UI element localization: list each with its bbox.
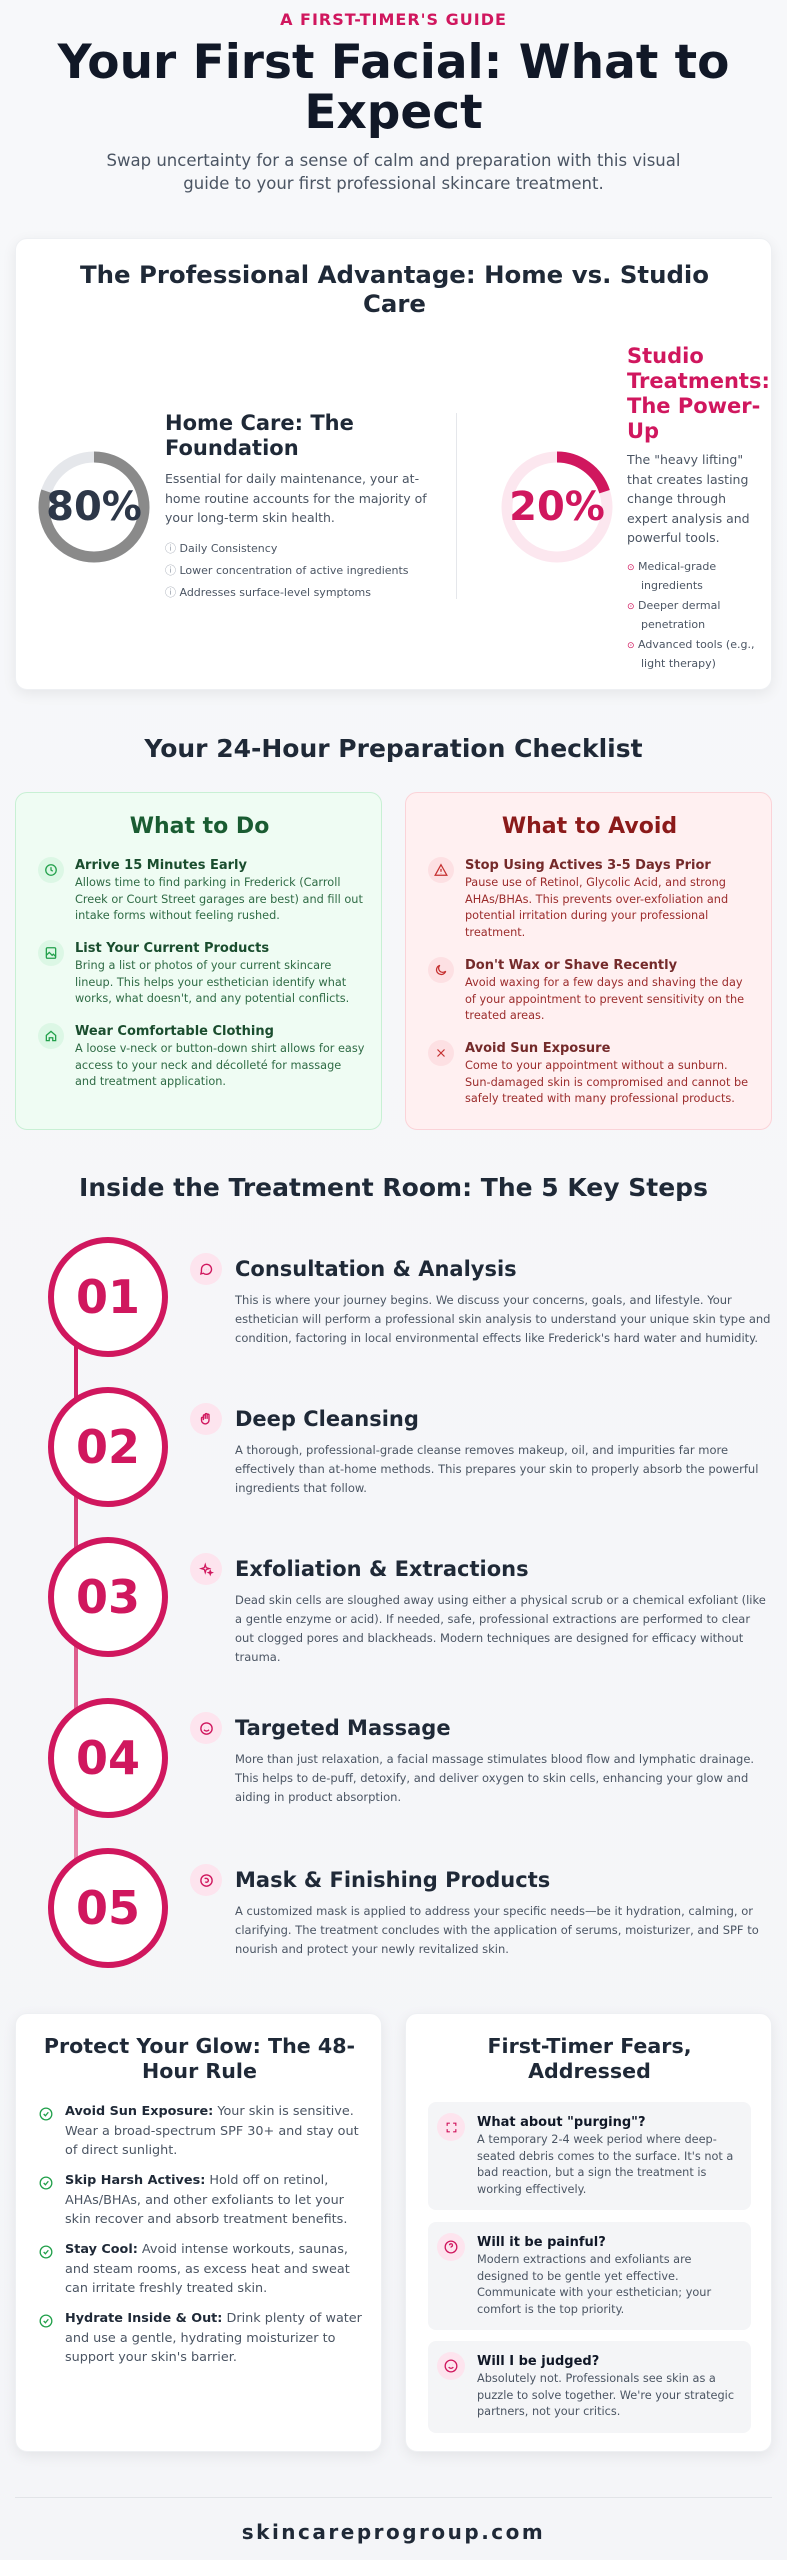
panel: what to do: What to Do	[130, 814, 269, 839]
rule items: Avoid Sun Exposure: Your skin is sensitive.	[65, 2104, 354, 2119]
item: actives: Pause use of Retinol, Glycolic Acid, and strong	[465, 876, 726, 889]
rule items: of direct sunlight.	[65, 2143, 177, 2158]
home care text	[165, 411, 427, 599]
step 5: Mask & Finishing Products	[235, 1868, 550, 1892]
step 4: aiding in product absorption.	[235, 1790, 401, 1804]
subtitle: Swap uncertainty for a sense of calm and preparation with this visual	[107, 151, 680, 170]
step 1: condition, factoring in local environmental effects like Frederick's hard water and humidity.	[235, 1331, 758, 1345]
rule items: skin recover and absorb treatment benefits.	[65, 2212, 347, 2227]
home care text: your long-term skin health.	[165, 510, 335, 525]
item: actives: potential irritation during your professional	[465, 909, 708, 922]
faq: purging: What about "purging"?	[477, 2115, 646, 2130]
step 2: 02	[76, 1420, 140, 1474]
heading: Care	[363, 289, 426, 318]
studio text: The "heavy lifting"	[627, 452, 743, 467]
bullets	[165, 542, 409, 599]
step 3: Exfoliation & Extractions	[235, 1557, 529, 1581]
chart: 20% donut	[502, 452, 612, 562]
item: wax	[428, 957, 744, 1022]
studio text: powerful tools.	[627, 530, 720, 545]
heading	[80, 260, 709, 318]
kicker: A FIRST-TIMER'S GUIDE	[280, 10, 507, 29]
faq: painful: Modern extractions and exfoliants are	[477, 2253, 691, 2266]
panel: fears: Addressed	[528, 2059, 651, 2083]
item: sun: Avoid Sun Exposure	[465, 1041, 610, 1056]
panel: 48-hour rule: Protect Your Glow: The 48-	[44, 2034, 355, 2058]
panel: what to do	[15, 792, 382, 1130]
step 5: nourish and protect your newly revitalized skin.	[235, 1942, 509, 1956]
subtitle: guide to your first professional skincare treatment.	[183, 174, 604, 193]
step 4: This helps to de-puff, detoxify, and deliver oxygen to skin cells, enhancing your glow and	[235, 1771, 748, 1785]
item: wax: Avoid waxing for a few days and shaving the day	[465, 976, 743, 989]
studio text: Up	[627, 419, 659, 443]
title: Expect	[304, 85, 483, 140]
faq: judged	[428, 2341, 751, 2433]
studio text: Studio	[627, 344, 704, 368]
step 1	[48, 1237, 770, 1357]
item: list products: Bring a list or photos of your current skincare	[75, 959, 331, 972]
step 4: 04	[76, 1731, 140, 1785]
faq: painful: designed to be gentle yet effective.	[477, 2270, 679, 2283]
heading: treatment room: Inside the Treatment Room: The 5 Key Steps	[79, 1173, 708, 1202]
panel: home vs studio	[15, 238, 772, 690]
item: list products: works, what doesn't, and any potential conflicts.	[75, 992, 349, 1005]
bullets: ⊙ Medical-grade	[627, 560, 716, 573]
step 3: out clogged pores and blackheads. Modern techniques are designed for efficacy without	[235, 1631, 743, 1645]
step 4: More than just relaxation, a facial massage stimulates blood flow and lymphatic drainage.	[235, 1752, 754, 1766]
faq: purging: seated debris comes to the surface. It's not a	[477, 2150, 733, 2163]
step 1: 01	[76, 1270, 140, 1324]
step 2: effectively than at-home methods. This prepares your skin to properly absorb the powerful	[235, 1462, 758, 1476]
item: wax: of your appointment to prevent sensitivity on the	[465, 993, 744, 1006]
step 2: Deep Cleansing	[235, 1407, 419, 1431]
rule items: Hydrate Inside & Out: Drink plenty of water	[65, 2311, 362, 2326]
rule items	[40, 2104, 362, 2365]
rule items: Skip Harsh Actives: Hold off on retinol,	[65, 2173, 328, 2188]
item: arrive early: Arrive 15 Minutes Early	[75, 858, 247, 873]
studio text: The Power-	[627, 394, 760, 418]
bullets: ingredients	[641, 579, 703, 592]
item: wax: Don't Wax or Shave Recently	[465, 958, 677, 973]
rule items: Wear a broad-spectrum SPF 30+ and stay out	[65, 2124, 359, 2138]
step 2: A thorough, professional-grade cleanse removes makeup, oil, and impurities far more	[235, 1443, 728, 1457]
studio text: light therapy)	[641, 657, 716, 670]
item: clothing: access to your neck and décolleté for massage	[75, 1059, 341, 1072]
item: list products: List Your Current Products	[75, 941, 269, 956]
item: sun: safely treated with many professional products.	[465, 1092, 735, 1105]
step 3	[48, 1537, 766, 1664]
step 2	[48, 1387, 758, 1507]
faq: painful: comfort is the top priority.	[477, 2303, 624, 2316]
step 1: This is where your journey begins. We discuss your concerns, goals, and lifestyle. Your	[235, 1293, 732, 1307]
item: clothing: A loose v-neck or button-down shirt allows for easy	[75, 1042, 364, 1055]
item: arrive early: intake forms without feeling rushed.	[75, 909, 280, 922]
faq: purging: bad reaction, but a sign the treatment is	[477, 2166, 706, 2179]
panel: fears: First-Timer Fears,	[487, 2034, 692, 2058]
panel: what to avoid: What to Avoid	[502, 814, 677, 839]
step 4: Targeted Massage	[235, 1716, 451, 1740]
item: sun	[428, 1040, 748, 1105]
item: sun: Come to your appointment without a sunburn.	[465, 1059, 728, 1072]
panel: 48-hour rule: Hour Rule	[142, 2059, 257, 2083]
chart: 80% donut	[38, 452, 150, 562]
timeline line	[74, 1340, 78, 1860]
panel: 48-hour rule	[15, 2013, 382, 2452]
studio text: penetration	[641, 618, 705, 631]
item: arrive early: Creek or Court Street garages are best) and fill out	[75, 893, 363, 906]
item: wax: treated areas.	[465, 1009, 545, 1022]
step 5: A customized mask is applied to address your specific needs—be it hydration, calming, or	[235, 1904, 753, 1918]
panel: 48-hour rule: and use a gentle, hydrating moisturizer to	[65, 2330, 335, 2346]
step 3: Dead skin cells are sloughed away using either a physical scrub or a chemical exfoliant (like	[235, 1593, 766, 1607]
faq: judged: Absolutely not. Professionals see skin as a	[477, 2372, 716, 2385]
title	[57, 35, 729, 140]
studio text: ⊙ Advanced tools (e.g.,	[627, 638, 754, 651]
item: list products: lineup. This helps your esthetician identify what	[75, 976, 346, 989]
step 5	[48, 1848, 759, 1968]
rule items: AHAs/BHAs, and other exfoliants to let your	[65, 2192, 344, 2208]
panel: what to avoid	[405, 792, 772, 1130]
bullets	[627, 560, 716, 592]
step 3: trauma.	[235, 1650, 280, 1664]
faq: painful	[428, 2222, 751, 2330]
rule items: Stay Cool: Avoid intense workouts, saunas,	[65, 2242, 348, 2257]
step 3: 03	[76, 1570, 140, 1624]
panel: fears	[405, 2013, 772, 2452]
step 2: ingredients that follow.	[235, 1481, 367, 1495]
faq: painful: Communicate with your esthetician; your	[477, 2286, 711, 2299]
faq: purging	[428, 2102, 751, 2210]
studio text: ⊙ Deeper dermal	[627, 599, 720, 612]
studio text: expert analysis and	[627, 510, 750, 526]
home care text: Foundation	[165, 436, 299, 460]
studio text: that creates lasting	[627, 472, 748, 486]
step 3: a gentle enzyme or acid). If needed, safe, professional extractions are performed to clear	[235, 1612, 750, 1626]
bullets: ⓘ Addresses surface-level symptoms	[165, 586, 371, 599]
heading: checklist: Your 24-Hour Preparation Checklist	[144, 734, 643, 763]
studio text: Treatments:	[627, 369, 770, 393]
home care text: Essential for daily maintenance, your at-	[165, 471, 419, 486]
step 1: esthetician will perform a professional skin analysis to understand your unique skin type and	[235, 1312, 770, 1326]
item: arrive early: Allows time to find parking in Frederick (Carroll	[75, 876, 340, 889]
bullets: ⓘ Daily Consistency	[165, 542, 277, 555]
item: sun: Sun-damaged skin is compromised and cannot be	[465, 1076, 748, 1089]
item: arrive early	[38, 857, 363, 922]
home care text: home routine accounts for the majority of	[165, 490, 427, 506]
studio text: change through	[627, 491, 726, 506]
step 1: Consultation & Analysis	[235, 1257, 517, 1281]
item: actives: treatment.	[465, 926, 525, 939]
chart: 20% donut: 20%	[509, 484, 605, 530]
footer: skincareprogroup.com	[242, 2520, 545, 2544]
bullets: ⓘ Lower concentration of active ingredients	[165, 564, 409, 577]
faq: judged: partners, not your critics.	[477, 2405, 620, 2418]
title: Your First Facial: What to	[58, 35, 729, 90]
heading: The Professional Advantage: Home vs. Studio	[80, 260, 709, 289]
item: clothing: Wear Comfortable Clothing	[75, 1024, 274, 1039]
home care text: Home Care: The	[165, 411, 354, 435]
faq: purging: working effectively.	[477, 2183, 586, 2196]
faq: purging: A temporary 2-4 week period where deep-	[477, 2133, 717, 2146]
step 4	[48, 1698, 754, 1818]
subtitle	[107, 151, 680, 193]
item: actives	[428, 857, 728, 939]
item: clothing	[38, 1023, 364, 1088]
step 5: clarifying. The treatment concludes with the application of serums, moisturizer, and SPF to	[235, 1923, 759, 1937]
rule items: and steam rooms, as excess heat and sweat	[65, 2262, 350, 2276]
faq: judged: puzzle to solve together. We're your strategic	[477, 2389, 734, 2402]
item: actives: AHAs/BHAs. This prevents over-exfoliation and	[465, 893, 728, 906]
item: clothing: and treatment application.	[75, 1075, 226, 1088]
faq: judged: Will I be judged?	[477, 2354, 599, 2369]
rule items: can irritate freshly treated skin.	[65, 2281, 267, 2296]
panel: 48-hour rule: support your skin's barrier.	[65, 2350, 237, 2365]
studio text	[626, 344, 770, 670]
item: list products	[38, 940, 349, 1005]
faq: painful: Will it be painful?	[477, 2235, 606, 2250]
step 5: 05	[76, 1881, 140, 1935]
item: actives: Stop Using Actives 3-5 Days Prior	[465, 858, 711, 873]
chart: 80% donut: 80%	[46, 484, 142, 530]
